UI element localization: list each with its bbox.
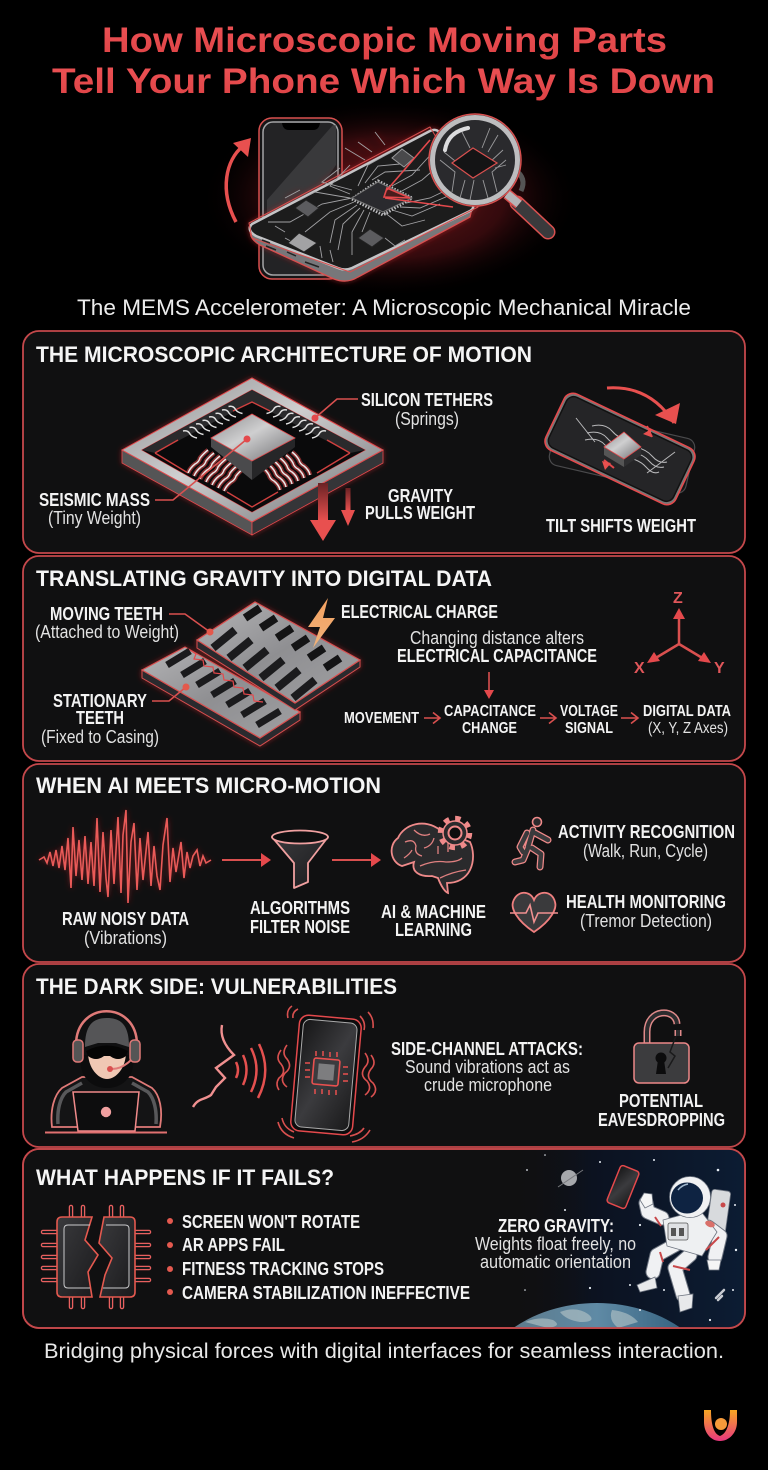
icon: upright phone bbox=[259, 118, 342, 279]
callout: seismic mass: SEISMIC MASS bbox=[39, 490, 150, 510]
icon: tilted phone with shifting weight bbox=[542, 388, 698, 508]
callout: stationary teeth: STATIONARY bbox=[53, 691, 147, 711]
text: side-channel attacks: SIDE-CHANNEL ATTACKS: bbox=[391, 1039, 583, 1059]
arrow bbox=[222, 853, 271, 867]
title: Tell Your Phone Which Way Is Down bbox=[52, 62, 715, 101]
list: failure consequences: SCREEN WON'T ROTATE bbox=[182, 1212, 360, 1232]
list: failure consequences: AR APPS FAIL bbox=[182, 1235, 285, 1255]
arrow bbox=[424, 712, 440, 724]
panel: translating gravity bbox=[23, 556, 745, 761]
flow: movement to digital data: SIGNAL bbox=[565, 720, 613, 737]
flow: movement to digital data: CHANGE bbox=[462, 720, 517, 737]
label: algorithms: ALGORITHMS bbox=[250, 898, 350, 918]
callout: silicon tethers: SILICON TETHERS bbox=[361, 390, 493, 410]
text: side-channel attacks: crude microphone bbox=[424, 1075, 552, 1095]
callout: stationary teeth bbox=[41, 684, 190, 747]
icon: main chip bbox=[352, 181, 412, 215]
label: tilt: TILT SHIFTS WEIGHT bbox=[546, 516, 696, 536]
pointer triangle from chip to lens bbox=[384, 140, 453, 207]
springs: silicon tethers bbox=[183, 406, 326, 491]
heading: WHEN AI MEETS MICRO-MOTION bbox=[36, 773, 381, 798]
label: AI and machine learning bbox=[381, 902, 486, 940]
text: activity recognition: ACTIVITY RECOGNITION bbox=[558, 822, 735, 842]
panel: microscopic architecture bbox=[23, 331, 745, 553]
text: zero gravity: automatic orientation bbox=[480, 1252, 631, 1272]
label: raw noisy data: (Vibrations) bbox=[84, 928, 167, 948]
logo bbox=[704, 1410, 737, 1441]
arrow bbox=[332, 853, 381, 867]
heading: WHAT HAPPENS IF IT FAILS? bbox=[36, 1165, 334, 1190]
icon: seismic mass frame bbox=[122, 378, 383, 535]
heading: THE MICROSCOPIC ARCHITECTURE OF MOTION bbox=[36, 342, 532, 367]
text: zero gravity: ZERO GRAVITY: bbox=[498, 1216, 614, 1236]
list: failure consequences bbox=[167, 1212, 470, 1303]
icon: comet bbox=[716, 1290, 724, 1300]
flow: movement to digital data: MOVEMENT bbox=[344, 710, 419, 727]
stars bbox=[524, 1154, 737, 1321]
text: activity recognition bbox=[558, 822, 735, 861]
chart: noisy waveform bbox=[39, 810, 211, 903]
flow: movement to digital data bbox=[344, 703, 731, 737]
flow: movement to digital data: (X, Y, Z Axes) bbox=[648, 720, 728, 737]
heading: THE DARK SIDE: VULNERABILITIES bbox=[36, 974, 397, 999]
label: AI and machine learning: LEARNING bbox=[395, 920, 472, 940]
icon: lightning bolt bbox=[308, 598, 335, 648]
text: zero gravity: Weights float freely, no bbox=[475, 1234, 636, 1254]
list: failure consequences: CAMERA STABILIZATION INEFFECTIVE bbox=[182, 1283, 470, 1303]
text: side-channel attacks bbox=[391, 1039, 583, 1095]
hero illustration: phone with magnified chip bbox=[200, 98, 580, 298]
icon: runner bbox=[515, 818, 548, 867]
icon: heart bbox=[510, 893, 558, 932]
panel: AI meets micro-motion bbox=[23, 764, 745, 962]
arrow bbox=[621, 712, 638, 724]
title bbox=[52, 21, 715, 101]
label: potential eavesdropping bbox=[598, 1091, 725, 1130]
seismic mass cube bbox=[211, 414, 295, 480]
icon: XYZ axes: X bbox=[634, 660, 645, 677]
text: health monitoring bbox=[566, 892, 726, 931]
icon: hacker with laptop bbox=[45, 1011, 167, 1132]
icon: XYZ axes bbox=[634, 590, 725, 677]
text: capacitance explanation: Changing distance alters bbox=[410, 628, 584, 648]
footer text: Bridging physical forces with digital interfaces for seamless interaction. bbox=[44, 1340, 724, 1363]
label: raw noisy data: RAW NOISY DATA bbox=[62, 909, 189, 929]
flow: movement to digital data: VOLTAGE bbox=[560, 703, 618, 720]
icon: magnifying glass bbox=[429, 114, 548, 232]
subtitle: The MEMS Accelerometer: A Microscopic Mechanical Miracle bbox=[77, 295, 691, 320]
arrow: down bbox=[484, 672, 494, 699]
arrow bbox=[540, 712, 556, 724]
icon: XYZ axes: Z bbox=[673, 590, 683, 607]
label: gravity: GRAVITY bbox=[388, 486, 453, 506]
callout: stationary teeth: TEETH bbox=[76, 708, 124, 728]
icon: rotation arrow bbox=[226, 138, 251, 222]
callout: moving teeth: MOVING TEETH bbox=[50, 604, 163, 624]
callout: stationary teeth: (Fixed to Casing) bbox=[41, 727, 159, 747]
text: side-channel attacks: Sound vibrations act as bbox=[405, 1057, 570, 1077]
label: raw noisy data bbox=[62, 909, 189, 948]
panel: what happens if it fails bbox=[22, 1148, 746, 1329]
label: AI and machine learning: AI & MACHINE bbox=[381, 902, 486, 922]
icon: tilted phone with circuit board bbox=[249, 127, 478, 281]
icon: small planet bbox=[558, 1170, 583, 1187]
icon: speaking face profile bbox=[193, 1025, 234, 1107]
label: potential eavesdropping: EAVESDROPPING bbox=[598, 1110, 725, 1130]
icon: XYZ axes: Y bbox=[714, 660, 725, 677]
label: gravity: PULLS WEIGHT bbox=[365, 503, 475, 523]
icon: funnel bbox=[272, 830, 328, 888]
callout: moving teeth bbox=[35, 604, 214, 642]
label: algorithms bbox=[250, 898, 350, 937]
title: How Microscopic Moving Parts bbox=[102, 21, 667, 60]
text: activity recognition: (Walk, Run, Cycle) bbox=[583, 841, 708, 861]
text: health monitoring: HEALTH MONITORING bbox=[566, 892, 726, 912]
icon: floating phone bbox=[606, 1165, 640, 1209]
panel: dark side bbox=[23, 964, 745, 1147]
text: capacitance explanation bbox=[397, 628, 597, 666]
callout: silicon tethers bbox=[312, 390, 493, 429]
text: capacitance explanation: ELECTRICAL CAPACITANCE bbox=[397, 646, 597, 666]
label: algorithms: FILTER NOISE bbox=[250, 917, 350, 937]
callout: silicon tethers: (Springs) bbox=[395, 409, 459, 429]
list: failure consequences: FITNESS TRACKING STOPS bbox=[182, 1259, 384, 1279]
arrows: gravity bbox=[310, 483, 355, 541]
space background with earth and astronaut bbox=[514, 1150, 744, 1328]
label: gravity bbox=[365, 486, 475, 523]
label: potential eavesdropping: POTENTIAL bbox=[619, 1091, 703, 1111]
icon: vibrating phone with chip bbox=[277, 1006, 376, 1142]
panel border redrawn over space bbox=[23, 1149, 745, 1328]
callout: seismic mass: (Tiny Weight) bbox=[48, 508, 141, 528]
icon: broken padlock bbox=[634, 1013, 689, 1083]
icon: brain and gear bbox=[392, 819, 473, 893]
text: zero gravity bbox=[475, 1216, 636, 1272]
icon: broken chip bbox=[43, 1207, 149, 1307]
icon: comb capacitor teeth bbox=[142, 602, 360, 746]
text: health monitoring: (Tremor Detection) bbox=[580, 911, 712, 931]
flow: movement to digital data: DIGITAL DATA bbox=[643, 703, 731, 720]
callout: seismic mass bbox=[39, 436, 250, 528]
icon: astronaut bbox=[637, 1176, 731, 1312]
label: electrical charge: ELECTRICAL CHARGE bbox=[341, 602, 498, 622]
flow: movement to digital data: CAPACITANCE bbox=[444, 703, 536, 720]
heading: TRANSLATING GRAVITY INTO DIGITAL DATA bbox=[36, 566, 492, 591]
callout: moving teeth: (Attached to Weight) bbox=[35, 622, 179, 642]
icon: sound waves bbox=[236, 1044, 265, 1098]
